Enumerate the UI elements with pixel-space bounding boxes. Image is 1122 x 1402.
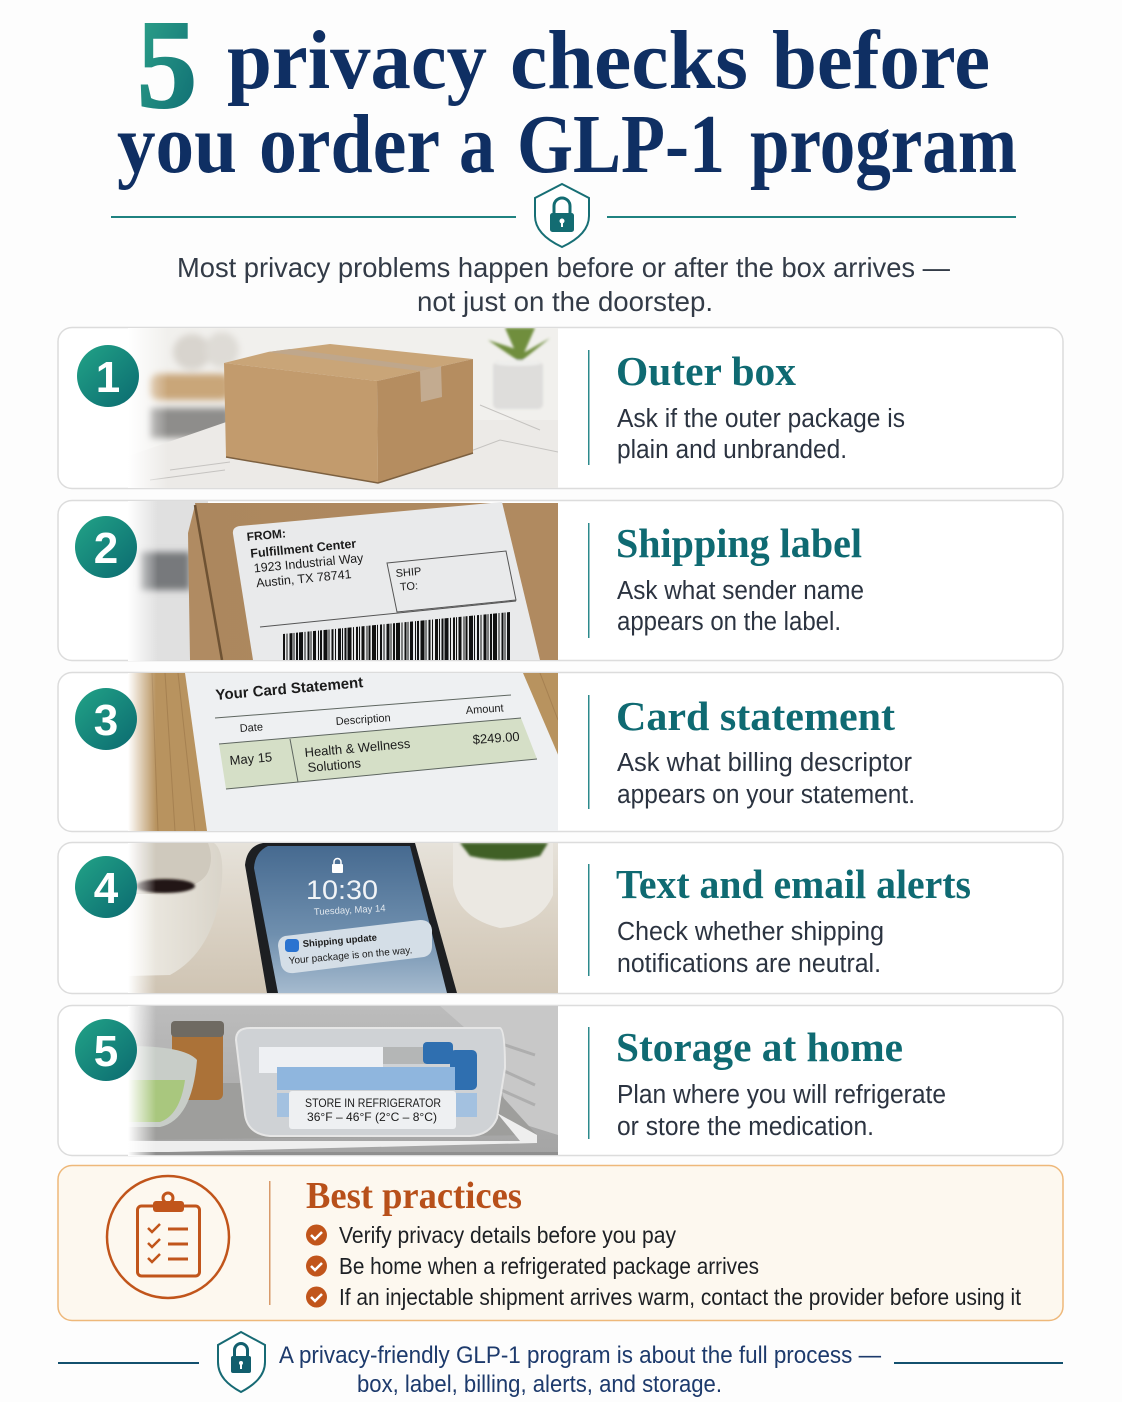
number badge 1 [77,345,139,407]
title: GLP-1 [517,98,725,191]
divider [269,1181,270,1305]
photo: shipping label on box [128,501,558,661]
photo: cardboard box on marble counter [128,328,558,488]
photo: card statement on wood table: Your Card Statement [215,674,364,704]
panel: shipping label [58,500,1063,661]
number badge 2: 2 [94,524,118,573]
photo: refrigerator shelf with pens: 36°F – 46°F (2°C – 8°C) [307,1110,437,1124]
photo: card statement on wood table: $249.00 [472,729,520,747]
title: program [750,98,1017,191]
photo: card statement on wood table: Date [239,721,263,735]
divider [588,695,590,809]
footer rule right [894,1362,1063,1364]
title: you [117,98,237,191]
title divider with shield icon [111,184,1016,247]
heading: shipping label: Shipping label [616,520,862,566]
number badge 5: 5 [94,1027,118,1076]
photo: card statement on wood table: Amount [465,702,504,717]
photo: phone lock screen: Shipping update [302,933,377,950]
body text [617,749,915,809]
title: 5 [137,0,197,135]
title: privacy [227,14,487,107]
body text: Check whether shipping [617,918,884,946]
divider [588,523,590,638]
panel: storage at home [58,1006,1063,1156]
photo: shipping label on box: FROM: [246,526,287,544]
heading: best practices: Best practices [306,1175,522,1217]
photo: card statement on wood table: Solutions [307,755,362,775]
body text: appears on your statement. [617,781,915,809]
photo: refrigerator shelf with pens: STORE IN REFRIGERATOR [305,1096,441,1110]
footer text: box, label, billing, alerts, and storage. [357,1371,722,1398]
divider [588,350,590,465]
photo: shipping label on box: SHIP [395,566,422,580]
panel: best practices [58,1166,1063,1320]
number badge 4 [75,856,137,918]
divider [588,864,590,976]
panel: text and email alerts [58,842,1063,994]
panel: outer box [58,328,1063,488]
photo: shipping label on box: 1923 Industrial Way [253,551,365,575]
photo: card statement on wood table: Health & Wellness [304,736,411,760]
photo: shipping label on box: TO: [399,580,419,594]
body text [617,1081,946,1141]
title: before [772,14,990,107]
photo: phone lock screen: Tuesday, May 14 [314,903,386,918]
body text: Ask what sender name [617,577,864,605]
body text: plain and unbranded. [617,436,847,464]
body text: Ask what billing descriptor [617,749,913,777]
body text [617,918,884,978]
heading: outer box: Outer box [616,348,796,394]
subtitle: not just on the doorstep. [417,286,713,317]
footer text [279,1342,881,1398]
checklist: If an injectable shipment arrives warm, contact the provider before using it [339,1284,1021,1310]
number badge 5 [75,1019,137,1081]
body text: notifications are neutral. [617,950,881,978]
body text: Plan where you will refrigerate [617,1081,946,1109]
divider [588,1027,590,1139]
number badge 2 [75,516,137,578]
checklist [306,1222,1021,1310]
subtitle [177,252,950,317]
checklist: Verify privacy details before you pay [339,1222,676,1248]
body text: appears on the label. [617,608,841,636]
title: checks [510,14,748,107]
number badge 3: 3 [94,696,118,745]
heading: storage at home: Storage at home [616,1024,903,1070]
title: a [459,98,495,191]
photo: shipping label on box: Austin, TX 78741 [256,567,352,590]
photo: phone lock screen: 10:30 [306,875,378,905]
subtitle: Most privacy problems happen before or after the box arrives — [177,252,950,283]
photo: phone lock screen [128,843,558,993]
body text [617,405,905,464]
heading: text and email alerts: Text and email alerts [616,861,971,907]
footer text: A privacy-friendly GLP-1 program is about the full process — [279,1342,881,1369]
photo: phone lock screen: Your package is on the way. [288,945,413,967]
photo: shipping label on box: Fulfillment Center [250,537,357,561]
number badge 3 [75,688,137,750]
title: order [259,98,440,191]
icon: clipboard [107,1176,229,1298]
body text: Ask if the outer package is [617,405,905,433]
photo: card statement on wood table: May 15 [229,749,273,768]
number badge 1: 1 [96,353,120,402]
photo: refrigerator shelf with pens [128,1006,558,1156]
footer rule left [58,1362,199,1364]
body text: or store the medication. [617,1113,874,1141]
heading: card statement: Card statement [616,693,895,739]
title [117,0,1017,191]
panel: card statement [58,672,1063,832]
body text [617,577,864,636]
icon: footer shield [218,1332,265,1392]
number badge 4: 4 [94,864,119,913]
checklist: Be home when a refrigerated package arrives [339,1253,759,1279]
photo: card statement on wood table [128,673,559,831]
photo: card statement on wood table: Description [335,712,391,728]
